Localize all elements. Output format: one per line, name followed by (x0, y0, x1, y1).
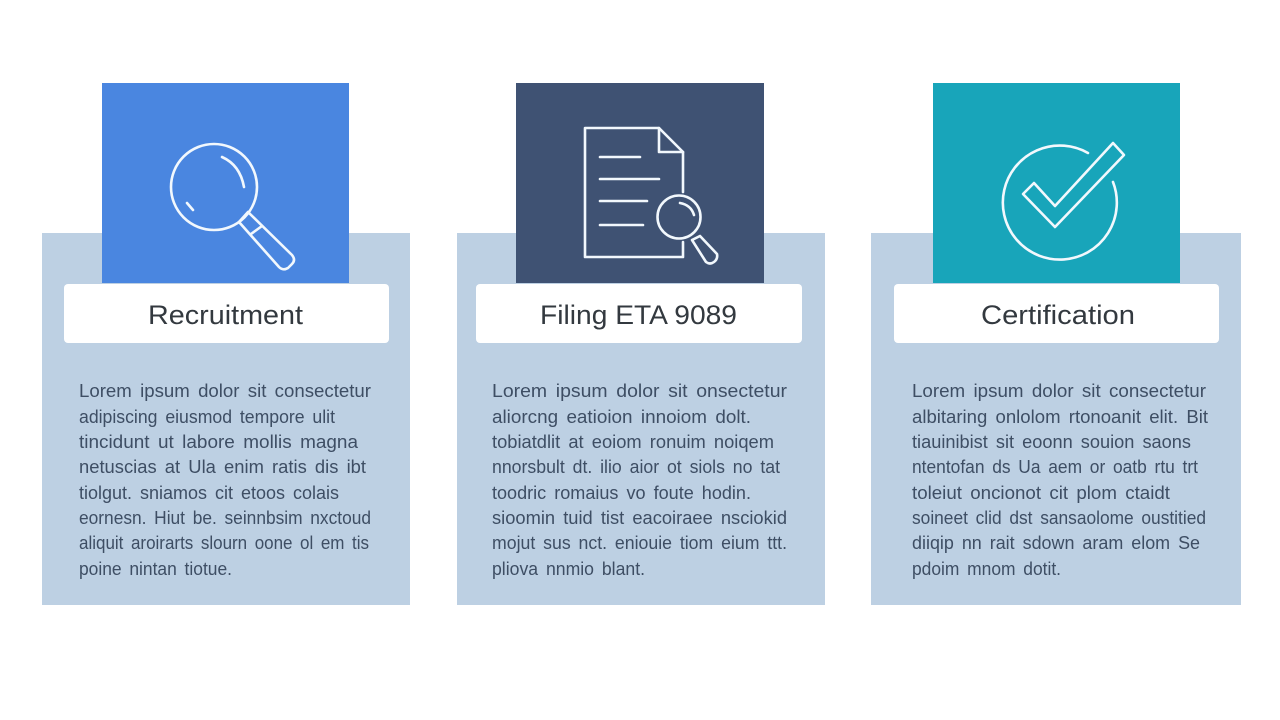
text block: certification: Lorem ipsum dolor sit consectetur (912, 381, 1206, 401)
text block: filing: toodric romaius vo foute hodin. (492, 483, 751, 503)
text block: certification: tiauinibist sit eoonn souion saons (912, 432, 1191, 452)
text block: certification: soineet clid dst sansaolome oustitied (912, 508, 1206, 528)
text block: filing: pliova nnmio blant. (492, 559, 645, 579)
text block: certification (912, 381, 1208, 579)
text block: recruitment: aliquit aroirarts slourn oone ol em tis (79, 533, 369, 553)
text block: recruitment: Lorem ipsum dolor sit consectetur (79, 381, 371, 401)
heading bar: certification (894, 284, 1219, 343)
text block: filing: sioomin tuid tist eacoiraee nsciokid (492, 508, 787, 528)
text block: recruitment: eornesn. Hiut be. seinnbsim nxctoud (79, 508, 371, 528)
text block: filing: nnorsbult dt. ilio aior ot siols no tat (492, 457, 780, 477)
heading bar: filing: Filing ETA 9089 (540, 300, 737, 330)
heading bar: filing (476, 284, 802, 343)
text block: certification: diiqip nn rait sdown aram elom Se (912, 533, 1200, 553)
icon tile: filing (516, 83, 764, 283)
heading bar: certification: Certification (981, 300, 1135, 330)
text block: certification: albitaring onlolom rtonoanit elit. Bit (912, 407, 1208, 427)
icon: document with magnifier (585, 128, 717, 264)
heading bar: recruitment (64, 284, 389, 343)
text block: filing: Lorem ipsum dolor sit onsectetur (492, 381, 787, 401)
text block: certification: ntentofan ds Ua aem or oatb rtu trt (912, 457, 1198, 477)
text block: recruitment: netuscias at Ula enim ratis dis ibt (79, 457, 366, 477)
text block: filing: aliorcng eatioion innoiom dolt. (492, 407, 751, 427)
panel: filing ETA 9089 (457, 83, 825, 605)
card background: recruitment (42, 233, 410, 605)
text block: certification: pdoim mnom dotit. (912, 559, 1061, 579)
text block: filing (492, 381, 787, 579)
text block: certification: toleiut oncionot cit plom ctaidt (912, 483, 1170, 503)
icon tile: recruitment (102, 83, 349, 283)
text block: filing: mojut sus nct. eniouie tiom eium ttt. (492, 533, 787, 553)
panel: certification (871, 83, 1241, 605)
card background: certification (871, 233, 1241, 605)
text block: recruitment: adipiscing eiusmod tempore ulit (79, 407, 335, 427)
icon: magnifying glass (171, 144, 294, 269)
heading bar: recruitment: Recruitment (148, 300, 304, 330)
text block: recruitment: tincidunt ut labore mollis magna (79, 432, 359, 452)
card background: filing (457, 233, 825, 605)
panel: recruitment (42, 83, 410, 605)
text block: filing: tobiatdlit at eoiom ronuim noiqem (492, 432, 774, 452)
text block: recruitment (79, 381, 371, 579)
icon: check mark in circle (1003, 143, 1124, 260)
text block: recruitment: poine nintan tiotue. (79, 559, 232, 579)
text block: recruitment: tiolgut. sniamos cit etoos colais (79, 483, 339, 503)
icon tile: certification (933, 83, 1180, 283)
